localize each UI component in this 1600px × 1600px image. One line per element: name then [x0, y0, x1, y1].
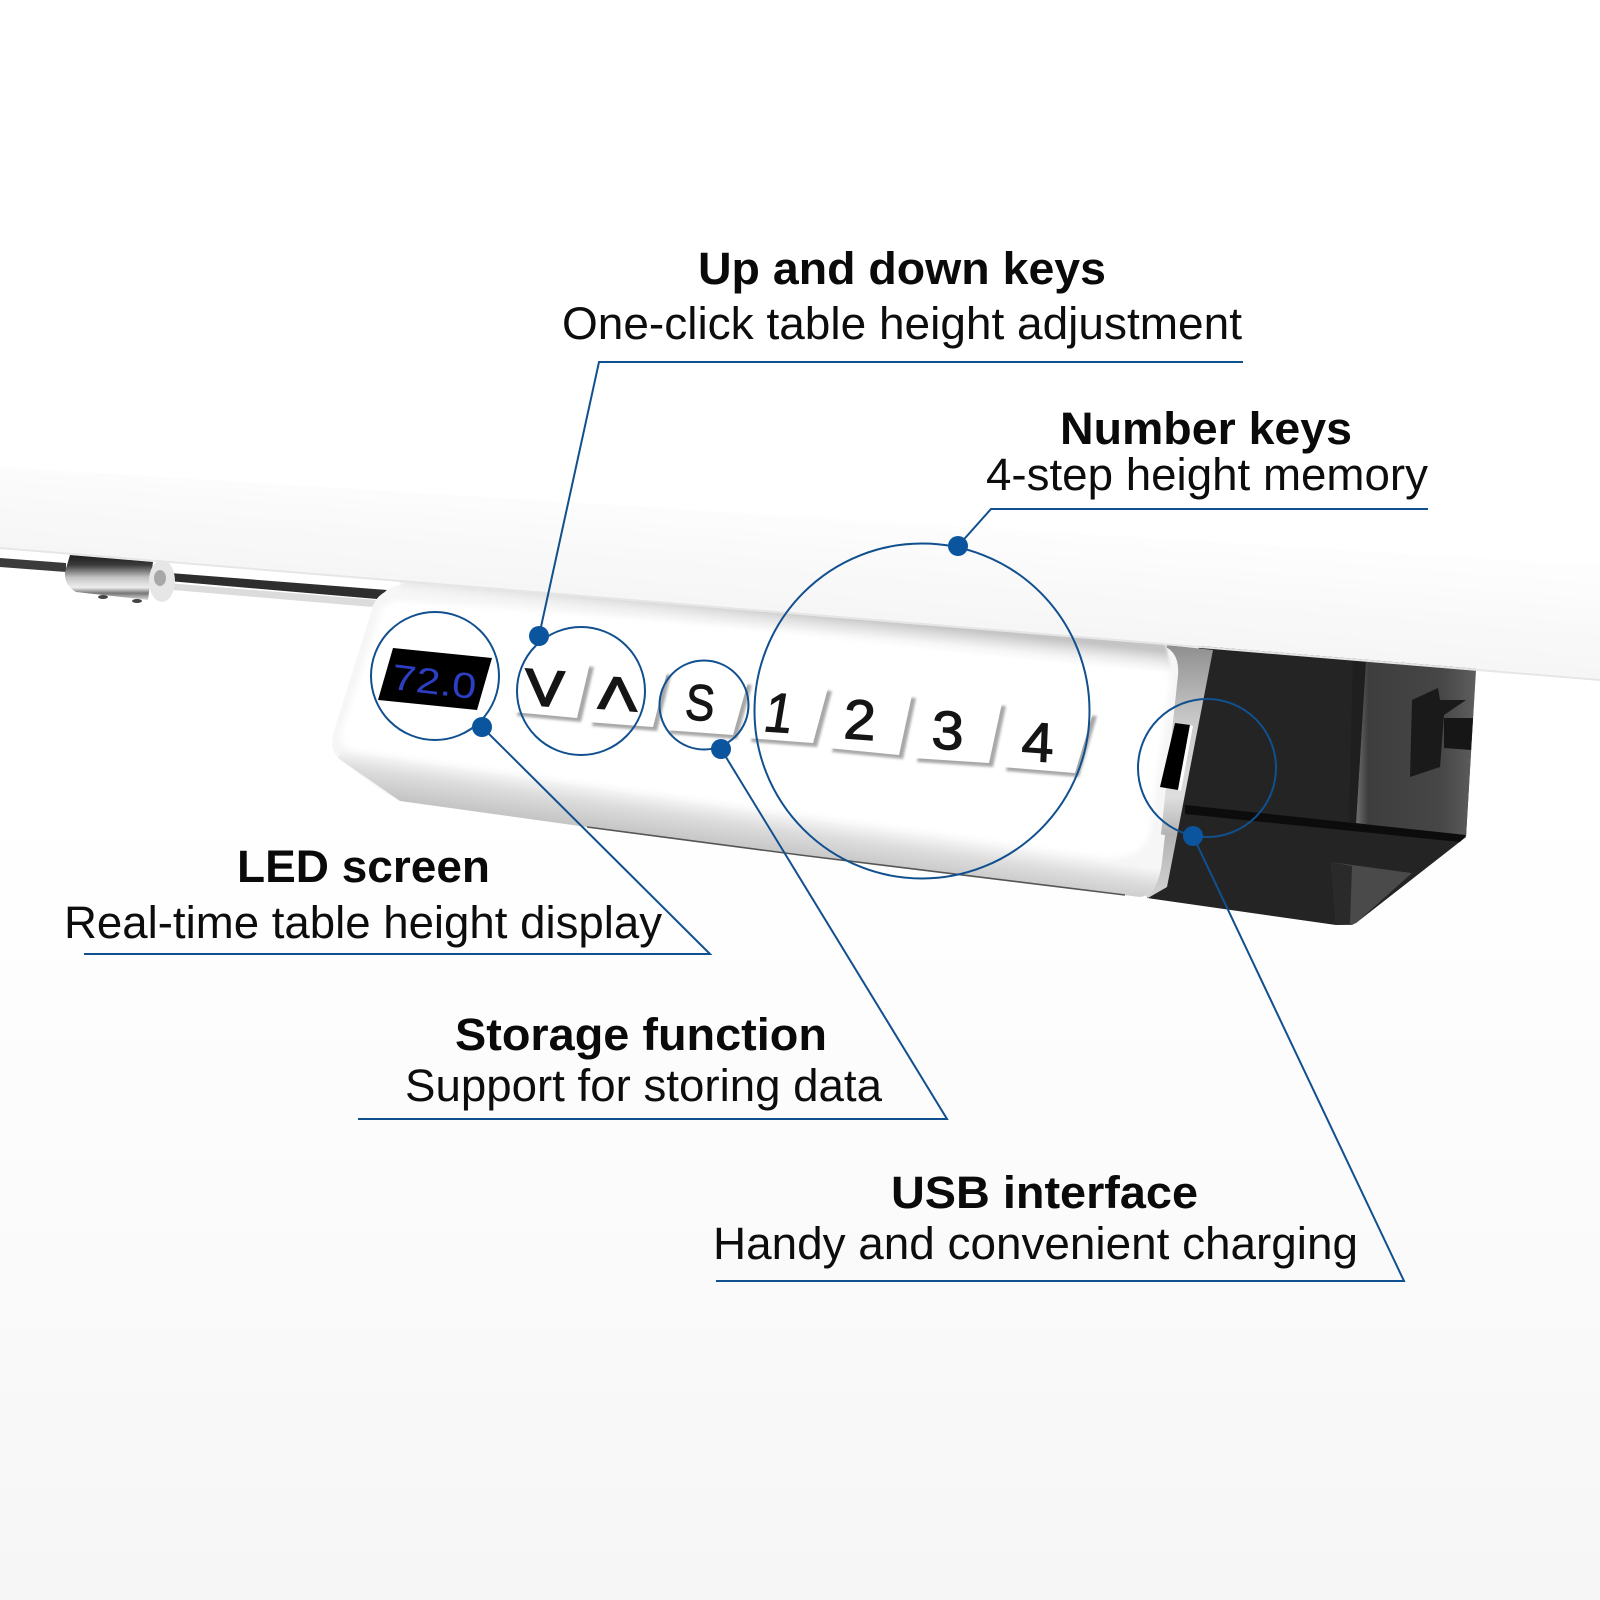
- key: down: [513, 659, 594, 722]
- callout: USB interface: [716, 699, 1404, 1281]
- callout: number keys: [754, 509, 1428, 878]
- control box front face: [341, 600, 1170, 858]
- text: number keys: Number keys: [1060, 403, 1352, 454]
- text: LED screen: Real-time table height display: [64, 897, 662, 948]
- key: up: Λ: [598, 667, 637, 722]
- desktop slab: [0, 467, 1600, 681]
- key: down: V: [526, 659, 564, 718]
- text: number keys: [986, 403, 1428, 500]
- dark desk frame unit: [1147, 640, 1476, 925]
- text: LED screen: [64, 841, 662, 948]
- text: USB interface: [713, 1167, 1358, 1269]
- text: USB interface: Handy and convenient charging: [713, 1218, 1358, 1269]
- callout: up and down keys: [517, 362, 1243, 755]
- key: store S: S: [683, 674, 717, 733]
- key: up: [588, 665, 671, 731]
- text: storage function: Support for storing data: [405, 1060, 883, 1111]
- control box body: [332, 583, 1178, 897]
- key: 2: [828, 688, 916, 759]
- USB port: [1160, 723, 1193, 791]
- text: up and down keys: One-click table height adjustment: [562, 298, 1243, 349]
- text: number keys: 4-step height memory: [986, 449, 1428, 500]
- key: 4: [1002, 707, 1097, 777]
- height readout: 72.0: [390, 656, 478, 707]
- text: up and down keys: Up and down keys: [698, 243, 1106, 294]
- text: storage function: [405, 1009, 883, 1111]
- control box silver side: [1120, 645, 1213, 898]
- text: storage function: Storage function: [455, 1009, 827, 1060]
- slide switch: [1410, 688, 1473, 777]
- key: 2: 2: [842, 688, 877, 753]
- cable and clamp: [0, 555, 387, 607]
- callout: LED screen: [84, 612, 710, 954]
- bottom edge line: [587, 827, 1125, 895]
- key: store S: [665, 674, 752, 739]
- black band across unit: [1183, 807, 1466, 873]
- LED screen: [378, 648, 492, 710]
- control box lower chamfer: [338, 735, 1165, 897]
- key: 4: 4: [1021, 710, 1055, 774]
- callout: storage key: [358, 660, 947, 1119]
- text: up and down keys: [562, 243, 1243, 349]
- key: 1: 1: [760, 682, 798, 745]
- key: 3: [913, 698, 1006, 767]
- text: LED screen: LED screen: [237, 841, 490, 892]
- key: 3: 3: [931, 699, 965, 762]
- key: 1: [747, 682, 832, 747]
- text: USB interface: USB interface: [891, 1167, 1198, 1218]
- top shade under the desk: [400, 578, 1172, 672]
- keypad: [513, 659, 1097, 777]
